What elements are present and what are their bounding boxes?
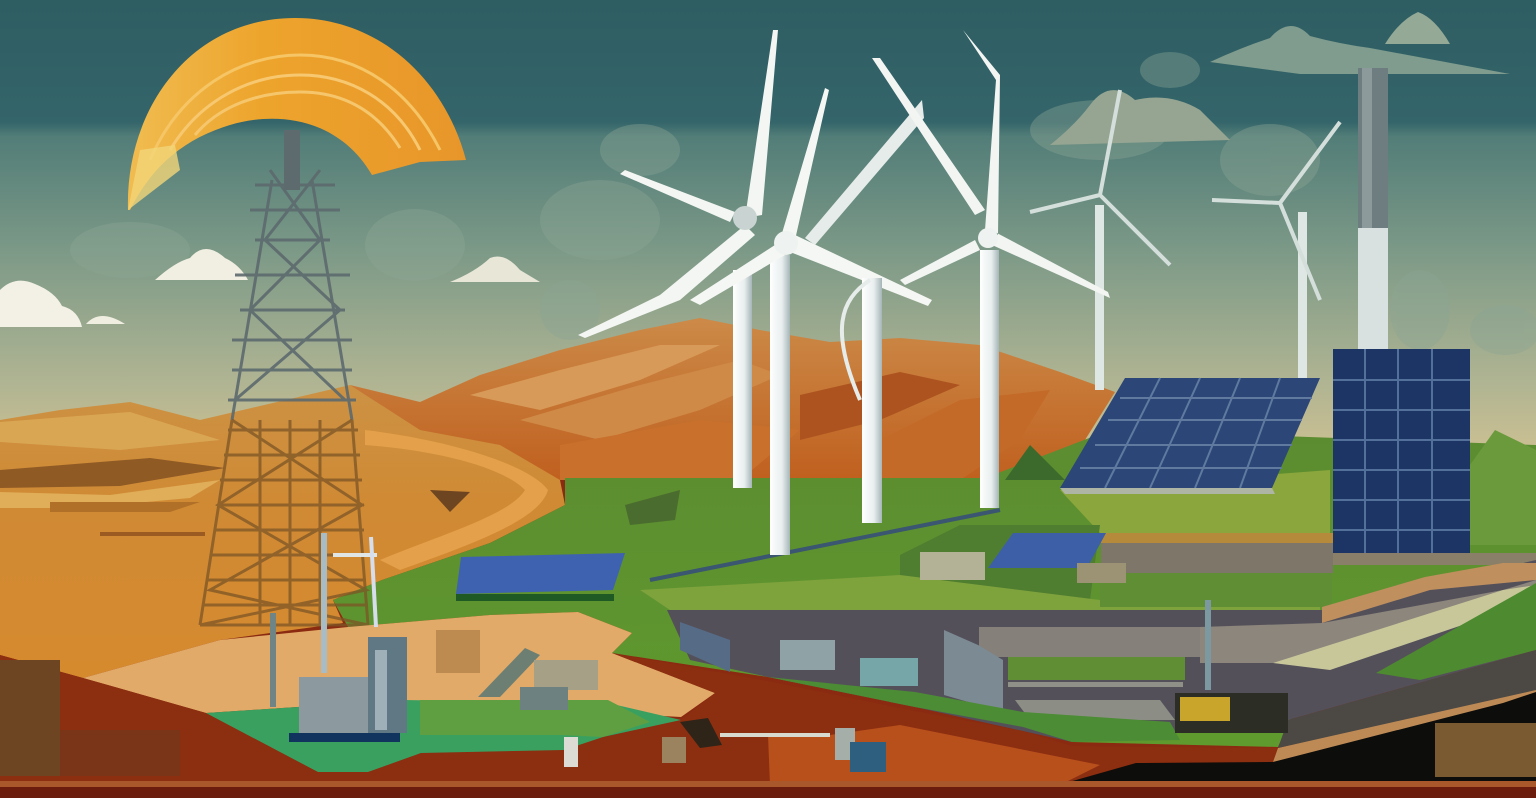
transmission tower — [200, 130, 368, 625]
large solar panel array — [1060, 378, 1320, 494]
mountains — [350, 318, 1115, 480]
tall solar panel — [1333, 349, 1470, 555]
sky — [0, 0, 1536, 470]
small turbine and poles — [270, 533, 377, 707]
green base pad — [206, 700, 681, 772]
tower top: steel lattice — [228, 170, 356, 420]
pipeline equipment — [564, 718, 886, 772]
small solar panels — [456, 533, 1106, 601]
small buildings — [920, 552, 1126, 583]
battery storage — [289, 637, 407, 742]
clouds: soft background — [70, 52, 1536, 355]
clouds: white — [0, 12, 1510, 327]
red earth and dark corner — [0, 650, 1536, 798]
desert ground — [0, 385, 565, 678]
sandy site — [83, 612, 715, 717]
tower base: brown lattice — [200, 420, 368, 625]
terraces: tan and gray strips — [1101, 533, 1536, 573]
excavator — [1175, 600, 1288, 733]
pump machine — [478, 648, 598, 710]
chimney tower — [1358, 68, 1388, 353]
underground cross-section — [667, 560, 1536, 742]
wind turbines: front group — [578, 30, 1110, 555]
green meadow — [333, 430, 1536, 747]
sun rainbow arc — [128, 18, 466, 210]
wind turbines: background pair — [1030, 90, 1340, 390]
